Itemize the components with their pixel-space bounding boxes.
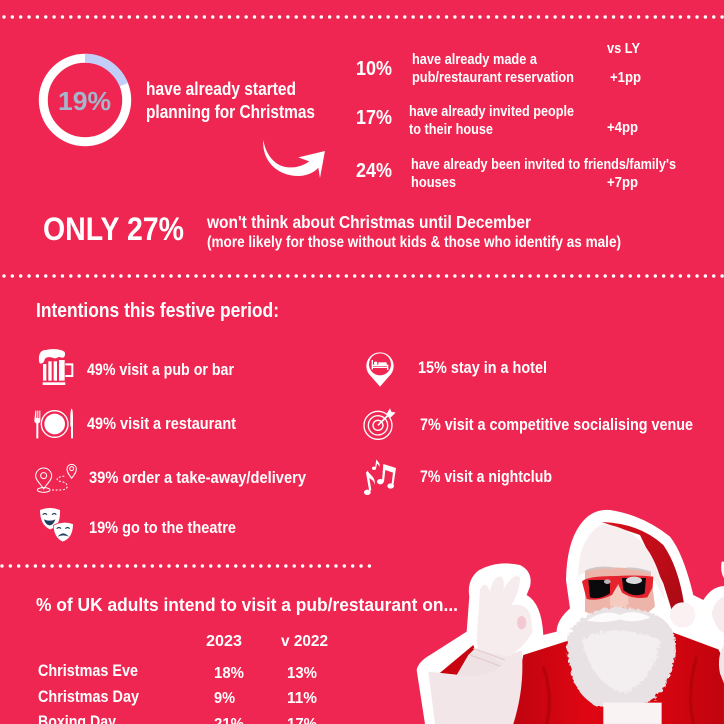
stat row: 24% been invited: have already been invited to friends/family's [411,156,676,173]
table: visits by day: 9% [214,690,235,707]
stat row: 17% invited people: have already invited people [409,103,574,120]
text: nightclub: 7% visit a nightclub [420,468,552,486]
stat row: 10% reservation [356,51,641,86]
icon: music notes [364,459,396,495]
stat row: 10% reservation: have already made a [412,51,538,68]
heading: intentions: Intentions this festive period: [36,299,279,322]
table: visits by day: Christmas Eve [38,662,138,680]
text: pub or bar: 49% visit a pub or bar [87,361,234,379]
callout: only 27%: (more likely for those without kids & those who identify as male) [207,234,621,251]
table: visits by day: v 2022 [281,633,328,650]
callout: only 27%: won't think about Christmas until December [206,212,531,232]
vs LY column header: vs LY [607,40,640,57]
text: theatre: 19% go to the theatre [89,519,236,537]
heading: planning for Christmas: planning for Christmas [146,101,315,122]
icon: theatre masks [40,508,73,542]
stat row: 24% been invited: 24% [356,160,392,182]
callout: only 27%: ONLY 27% [43,211,184,247]
table: visits by day: 18% [214,665,244,682]
stat row: 17% invited people: 17% [356,107,392,129]
text: take-away: 39% order a take-away/delivery [89,469,307,487]
stat row: 24% been invited: +7pp [607,174,638,191]
heading: planning for Christmas [146,78,315,122]
callout: only 27% [43,211,621,251]
donut chart: 19%: 19% [58,86,111,116]
stat row: 24% been invited [356,156,676,191]
text: hotel: 15% stay in a hotel [418,359,547,377]
stat row: 17% invited people: to their house [409,121,493,138]
table: visits by day: 11% [287,690,317,707]
icon: plate and cutlery [34,408,73,438]
heading: planning for Christmas: have already started [146,78,296,99]
icon: hotel pin [366,352,394,387]
table: visits by day: 13% [287,665,317,682]
stat row: 17% invited people [356,103,638,138]
stat row: 10% reservation: +1pp [610,69,641,86]
heading: UK adults intend to visit: % of UK adults intend to visit a pub/restaurant on... [36,594,458,615]
arrow: curved to stats [263,140,325,178]
icon: beer mug [39,349,72,385]
table: visits by day [38,633,328,724]
stat row: 10% reservation: 10% [356,58,392,80]
stat row: 24% been invited: houses [411,174,456,191]
donut chart: 19% [43,58,127,142]
table: visits by day: Christmas Day [38,688,140,706]
icon: target [364,409,395,439]
icon: route pins [36,464,76,492]
illustration: Santa with sunglasses [417,510,724,724]
table: visits by day: 2023 [206,633,242,650]
text: restaurant: 49% visit a restaurant [87,415,236,433]
stat row: 17% invited people: +4pp [607,119,638,136]
stat row: 10% reservation: pub/restaurant reservation [412,69,574,86]
